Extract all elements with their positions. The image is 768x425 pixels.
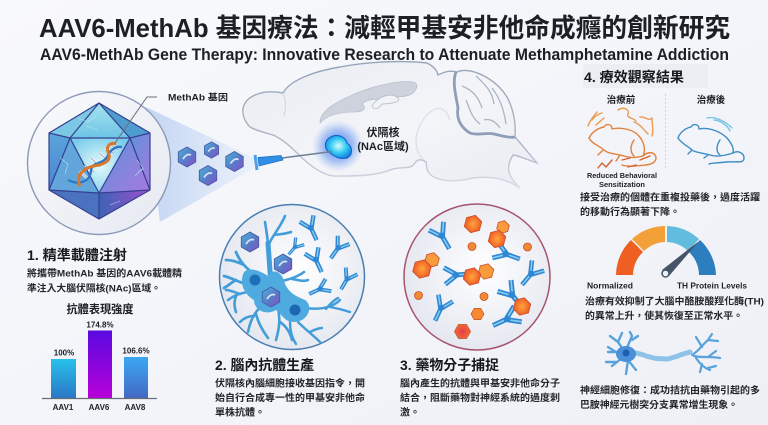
section 2 text (215, 378, 366, 418)
bar chart: antibody expression: 174.8% (86, 320, 114, 330)
icon: DNA helix (68, 143, 122, 186)
label: nucleus accumbens (357, 125, 409, 153)
bar chart: antibody expression: 抗體表現強度 (66, 302, 134, 316)
caption: reduced sensitization: Sensitization (599, 180, 645, 189)
section 4 text: neuron repair: 巴胺神經元樹突分支異常增生現象。 (580, 399, 738, 411)
section 2 text: 始自行合成專一性的甲基安非他命 (215, 392, 366, 404)
section 4 text: TH: 治療有效抑制了大腦中酪胺酸羥化酶(TH) (585, 296, 764, 308)
vectors in cell (241, 232, 292, 307)
gauge: TH protein level (587, 226, 747, 290)
icon: repaired neuron (606, 332, 720, 374)
callout: MethAb gene (115, 92, 228, 143)
section 1 text: 將攜帶MethAb 基因的AAV6載體精 (27, 268, 183, 280)
gauge: TH protein level: Normalized (587, 280, 633, 290)
section 3 heading: 3. 藥物分子捕捉 (400, 357, 499, 373)
section 1 text (27, 268, 183, 294)
bar AAV1 (51, 359, 76, 398)
section 4 text: behaviour: 的移動行為顯著下降。 (580, 206, 680, 218)
bar chart: antibody expression (42, 302, 157, 412)
section 4 heading: 4. 療效觀察結果 (584, 69, 684, 85)
section 4 text: TH: 的異常上升，使其恢復至正常水平。 (585, 310, 743, 322)
icon: syringe (255, 152, 332, 170)
icon: vector particles (178, 142, 243, 186)
drug molecules (412, 213, 532, 342)
panel: drug capture circle (404, 204, 550, 350)
section 4 text: behaviour (580, 192, 761, 218)
icon: calm mouse (678, 118, 744, 164)
antibodies (428, 222, 544, 333)
bar chart: antibody expression: AAV1 (53, 403, 74, 412)
label: after treatment: 治療後 (697, 94, 726, 106)
title: AAV6-MethAb 基因療法：減輕甲基安非他命成癮的創新研究 (39, 13, 730, 43)
section 2 text: 單株抗體。 (215, 406, 265, 418)
bar chart: antibody expression: AAV8 (125, 403, 146, 412)
section 4 text: neuron repair (580, 384, 760, 411)
brain illustration (243, 62, 537, 188)
callout: MethAb gene: MethAb 基因 (168, 92, 228, 102)
caption: reduced sensitization (587, 171, 657, 189)
section 4 text: TH (585, 296, 764, 322)
section 1 heading: 1. 精準載體注射 (27, 247, 127, 263)
label: nucleus accumbens: (NAc區域) (357, 139, 409, 153)
icon: hyperactive mouse (588, 108, 656, 168)
label: before treatment: 治療前 (607, 94, 636, 106)
section 2 text: 伏隔核內腦細胞接收基因指令，開 (215, 378, 365, 390)
icon: AAV6 capsid in sphere (28, 92, 170, 234)
delivery beam (146, 107, 254, 222)
section 3 text: 腦內產生的抗體與甲基安非他命分子 (400, 378, 561, 390)
bar chart: antibody expression: AAV6 (89, 403, 110, 412)
bar chart: antibody expression: 100% (54, 348, 74, 358)
subtitle: AAV6-MethAb Gene Therapy: Innovative Research to Attenuate Methamphetamine Addiction (40, 45, 729, 64)
section 2 heading: 2. 腦內抗體生產 (215, 357, 314, 373)
section 1 text: 準注入大腦伏隔核(NAc)區域。 (27, 282, 161, 294)
panel: antibody production circle (220, 204, 364, 350)
neurons (224, 216, 350, 344)
label: nucleus accumbens: 伏隔核 (366, 125, 400, 139)
bar chart: antibody expression: 106.6% (122, 346, 150, 356)
caption: reduced sensitization: Reduced Behavioral (587, 171, 657, 180)
gauge: TH protein level: TH Protein Levels (677, 280, 747, 290)
section 4 heading (583, 64, 708, 88)
section 3 text: 激。 (400, 406, 420, 418)
section 3 text (400, 378, 561, 418)
section 4 text: neuron repair: 神經細胞修復：成功拮抗由藥物引起的多 (580, 384, 760, 396)
section 4 text: behaviour: 接受治療的個體在重複投藥後，過度活躍 (580, 192, 761, 204)
section 3 text: 結合，阻斷藥物對神經系統的過度刺 (400, 392, 560, 404)
antibodies (284, 215, 358, 300)
needle (662, 241, 699, 277)
